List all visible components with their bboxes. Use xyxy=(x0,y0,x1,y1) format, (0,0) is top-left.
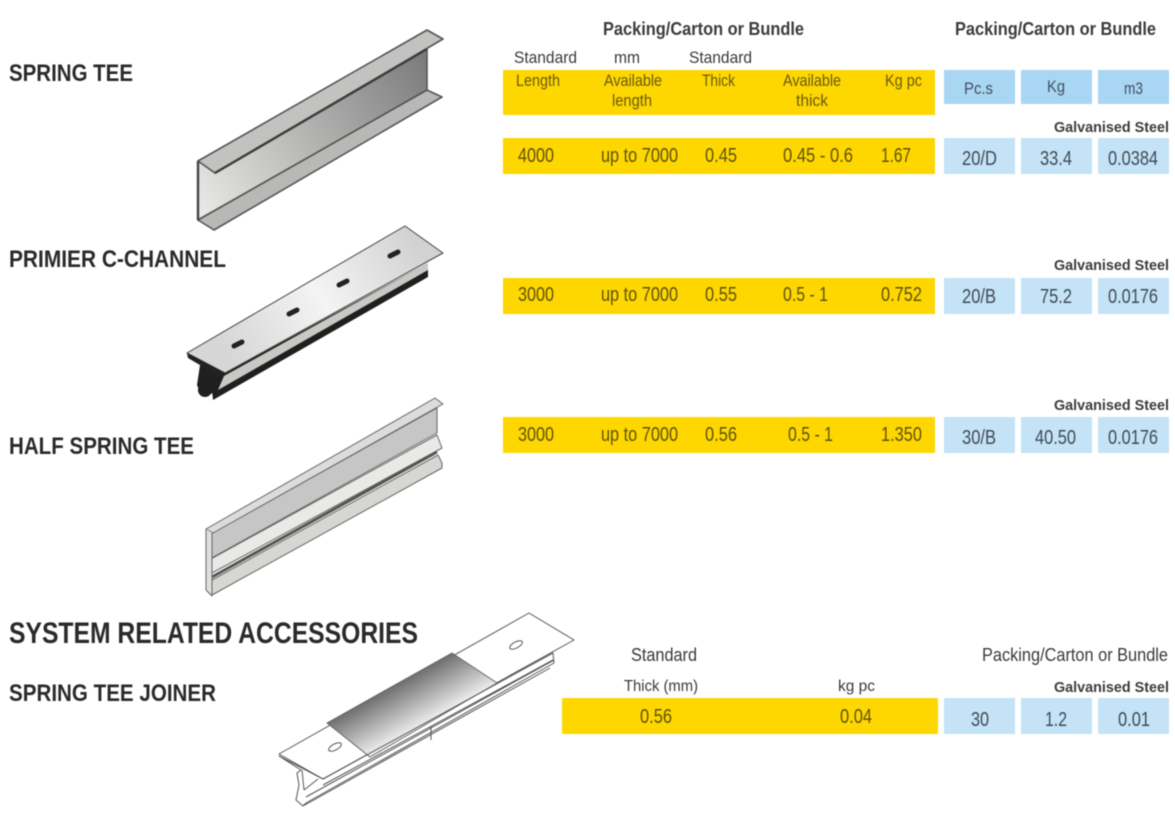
row: half spring tee data: 0.0176 xyxy=(1108,426,1158,449)
row: half spring tee data xyxy=(503,417,1169,453)
heading: spring tee: SPRING TEE xyxy=(9,60,133,87)
row: primier c-channel data: 0.55 xyxy=(705,284,737,306)
header cells: blue: Kg xyxy=(1047,78,1065,96)
column group labels: Standard xyxy=(689,48,752,67)
table heading: packing left: Packing/Carton or Bundle xyxy=(603,19,804,39)
heading: half spring tee: HALF SPRING TEE xyxy=(9,433,194,460)
row: joiner data xyxy=(562,698,1169,734)
row: spring tee data: 0.0384 xyxy=(1108,147,1158,170)
header bar: yellow: Available xyxy=(783,72,841,90)
row: joiner data: 0.56 xyxy=(640,706,672,728)
label: galvanised steel 2: Galvanised Steel xyxy=(1054,257,1169,274)
header bar: yellow: Length xyxy=(516,72,560,90)
row: primier c-channel data: 75.2 xyxy=(1040,285,1072,308)
icon: primier c-channel profile xyxy=(187,226,443,400)
row: spring tee data: 0.45 xyxy=(705,145,737,167)
row: half spring tee data: 0.5 - 1 xyxy=(788,424,833,446)
icon: spring tee profile xyxy=(198,30,443,230)
row: half spring tee data: 40.50 xyxy=(1035,426,1076,449)
column group labels xyxy=(514,48,752,67)
header cells: blue: m3 xyxy=(1124,80,1143,98)
row: spring tee data: 0.45 - 0.6 xyxy=(783,145,853,167)
row: spring tee data: 33.4 xyxy=(1040,147,1072,170)
column group labels: mm xyxy=(614,48,640,67)
column group labels: Standard xyxy=(514,48,577,67)
row: primier c-channel data: 0.752 xyxy=(881,284,922,306)
header bar: yellow: Available xyxy=(604,72,662,90)
heading: primier c-channel: PRIMIER C-CHANNEL xyxy=(9,246,226,273)
row: half spring tee data: 30/B xyxy=(962,426,996,449)
row: spring tee data: up to 7000 xyxy=(601,145,678,167)
row: joiner data: 30 xyxy=(971,708,989,731)
label: galvanised steel 3: Galvanised Steel xyxy=(1054,397,1169,414)
row: spring tee data: 4000 xyxy=(518,145,554,167)
header bar: yellow: Kg pc xyxy=(885,72,922,90)
row: joiner data: 0.04 xyxy=(840,706,872,728)
row: half spring tee data: 0.56 xyxy=(705,424,737,446)
label: galvanised steel 1: Galvanised Steel xyxy=(1054,119,1169,136)
row: spring tee data: 20/D xyxy=(962,147,997,170)
row: primier c-channel data: 3000 xyxy=(518,284,554,306)
joiner column labels: Thick (mm) xyxy=(624,678,698,695)
joiner column labels: kg pc xyxy=(838,678,875,695)
row: primier c-channel data: up to 7000 xyxy=(601,284,678,306)
row: primier c-channel data: 20/B xyxy=(962,285,996,308)
row: half spring tee data: up to 7000 xyxy=(601,424,678,446)
joiner label: standard: Standard xyxy=(631,645,697,665)
row: half spring tee data: 1.350 xyxy=(881,424,922,446)
row: joiner data: 0.01 xyxy=(1118,708,1150,731)
header bar: yellow: Thick xyxy=(702,72,736,90)
row: primier c-channel data: 0.0176 xyxy=(1108,285,1158,308)
table heading: packing right: Packing/Carton or Bundle xyxy=(955,19,1156,39)
heading: system related accessories: SYSTEM RELATED ACCESSORIES xyxy=(9,617,418,650)
header bar: yellow: length xyxy=(612,92,652,110)
heading: spring tee joiner: SPRING TEE JOINER xyxy=(9,680,216,707)
row: half spring tee data: 3000 xyxy=(518,424,554,446)
header cells: blue xyxy=(944,70,1169,104)
header cells: blue: Pc.s xyxy=(964,80,993,98)
icon: spring tee joiner profile xyxy=(279,613,574,806)
holes xyxy=(234,252,398,346)
row: primier c-channel data xyxy=(503,278,1169,314)
row: spring tee data xyxy=(503,138,1169,174)
row: joiner data: 1.2 xyxy=(1045,708,1067,731)
row: primier c-channel data: 0.5 - 1 xyxy=(783,284,828,306)
header bar: yellow: thick xyxy=(796,92,829,110)
joiner column labels xyxy=(624,678,875,695)
icon: half spring tee profile xyxy=(206,398,443,596)
row: spring tee data: 1.67 xyxy=(881,145,911,167)
label: galvanised steel 4: Galvanised Steel xyxy=(1054,679,1169,696)
header bar: yellow xyxy=(503,70,935,115)
